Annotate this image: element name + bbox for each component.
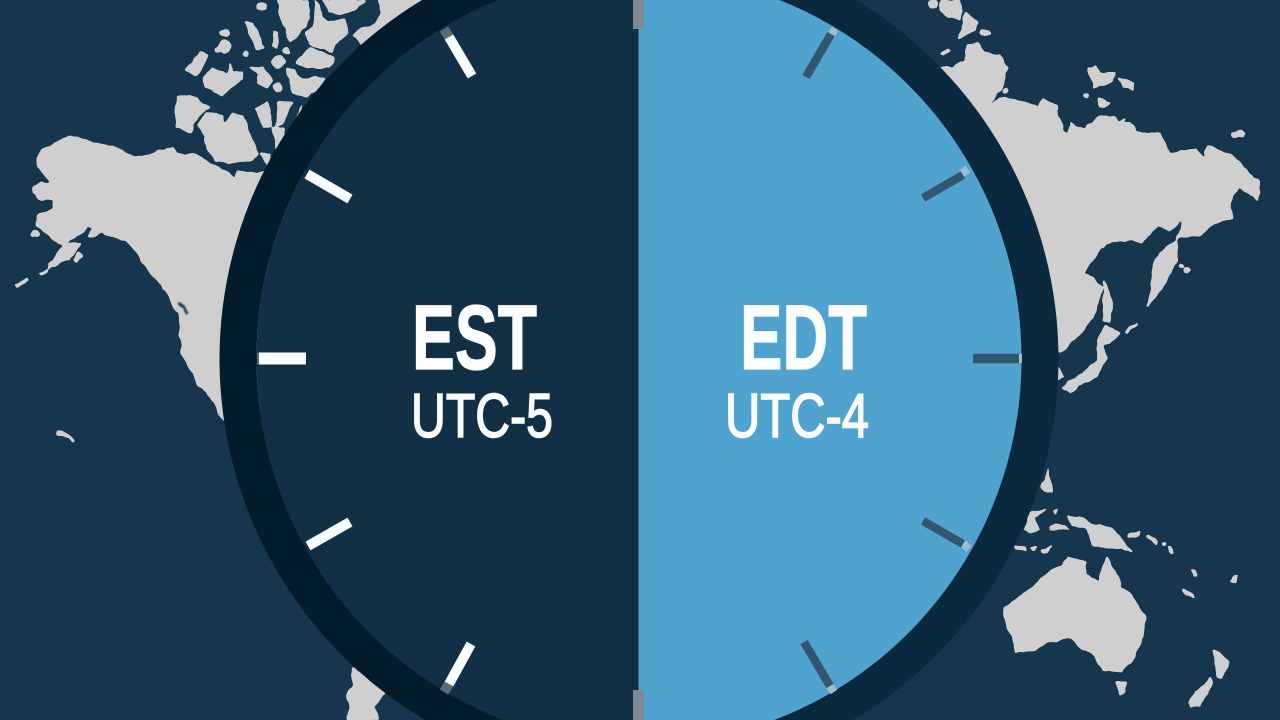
panel: EDT right half of dial xyxy=(638,0,1022,720)
ring left half xyxy=(220,0,504,720)
map: South America xyxy=(347,667,385,720)
panel: EST left half of dial xyxy=(256,0,638,720)
tick marks: EST side xyxy=(257,29,472,692)
label: UTC-5: UTC-5 xyxy=(411,382,553,451)
map: Arctic archipelago xyxy=(175,0,430,168)
map: Oceania xyxy=(1003,467,1238,707)
label: EDT: EDT xyxy=(740,287,867,389)
tick base stubs xyxy=(830,29,1022,692)
centre tick bottom xyxy=(633,690,644,720)
tick base stubs xyxy=(257,29,449,692)
channels in the coast xyxy=(178,303,189,314)
centre tick top xyxy=(633,0,644,29)
ring right half xyxy=(774,0,1058,720)
label: UTC-4: UTC-4 xyxy=(725,382,869,451)
dark ticks xyxy=(804,34,1019,686)
map: Asia xyxy=(920,0,1260,393)
tick marks: EDT side xyxy=(804,29,1022,692)
dial: outer ring xyxy=(220,0,1058,720)
map: North America xyxy=(15,135,320,443)
label: EST: EST xyxy=(412,287,537,389)
white ticks xyxy=(259,37,472,684)
